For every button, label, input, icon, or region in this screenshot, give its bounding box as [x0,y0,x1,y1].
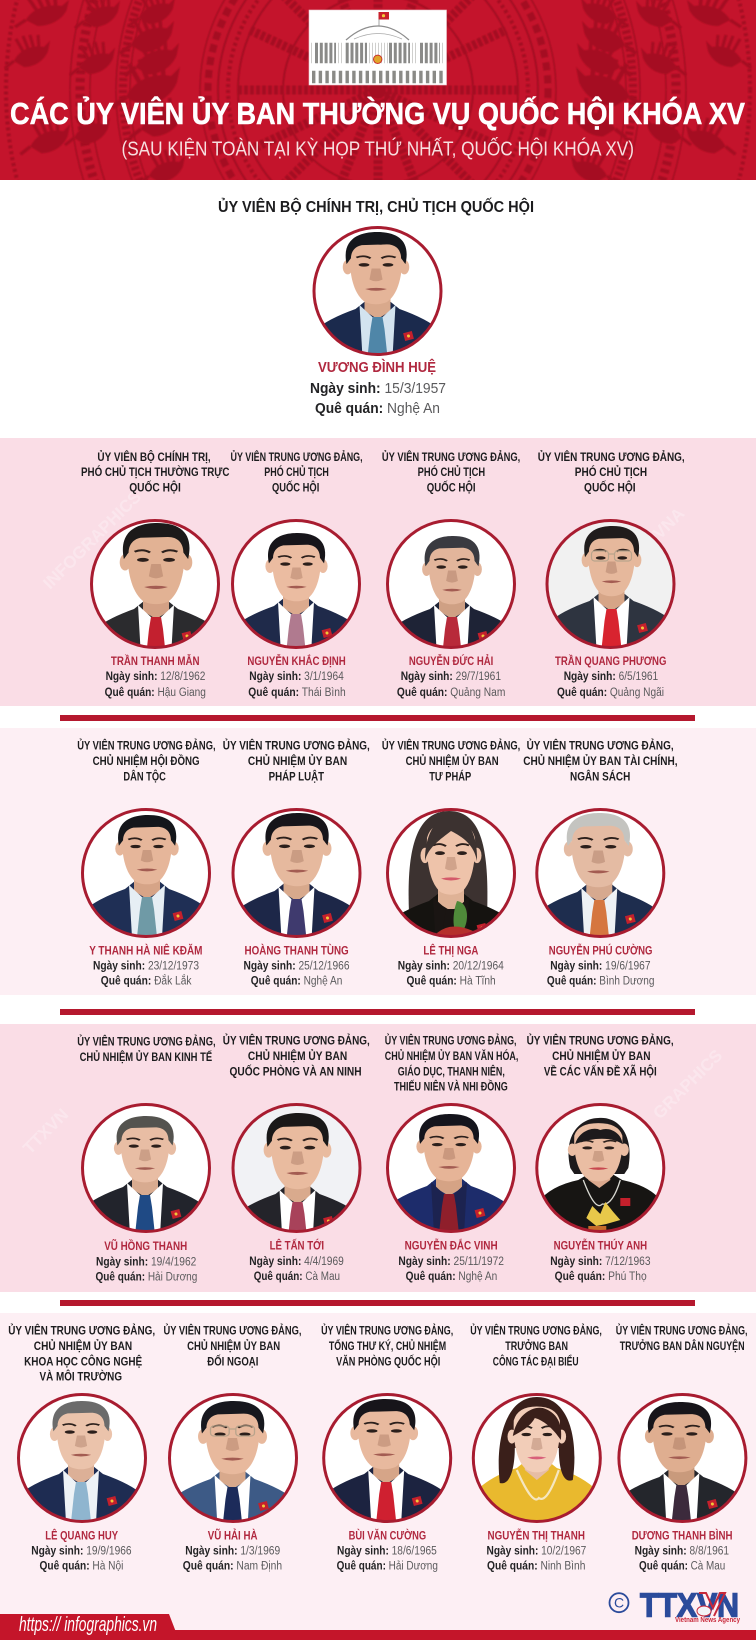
member: Lê Thị Nga: Quê quán: Hà Tĩnh [406,976,496,988]
member: Trần Quang Phương: PHÓ CHỦ TỊCH [575,466,647,479]
member: Y Thanh Hà Niê Kđăm: Y THANH HÀ NIÊ KĐĂM [89,944,202,957]
member: Nguyễn Đắc Vinh: CHỦ NHIỆM ỦY BAN VĂN HÓA, [385,1050,518,1063]
member: Nguyễn Thúy Anh [527,1035,674,1283]
member: Trần Thanh Mẫn: ỦY VIÊN BỘ CHÍNH TRỊ, [97,451,211,464]
member: Nguyễn Khắc Định: NGUYỄN KHẮC ĐỊNH [247,655,346,668]
member: Lê Thị Nga: LÊ THỊ NGA [423,944,478,957]
member: Trần Quang Phương [538,451,685,699]
watermarks: TTXVN [19,1105,72,1158]
member: Nguyễn Đức Hải [382,451,520,699]
member: Lê Tấn Tới: CHỦ NHIỆM ỦY BAN [248,1050,347,1063]
member: Nguyễn Đắc Vinh: Quê quán: Nghệ An [406,1271,497,1283]
member: Bùi Văn Cường: BÙI VĂN CƯỜNG [349,1529,426,1542]
logo: TTXVN: TTXVN [640,1587,739,1624]
member: Lê Tấn Tới: Ngày sinh: 4/4/1969 [249,1256,344,1268]
member: Nguyễn Đắc Vinh: GIÁO DỤC, THANH NIÊN, [398,1065,505,1078]
member: Vũ Hải Hà: Ngày sinh: 1/3/1969 [185,1546,280,1558]
member: Vũ Hải Hà: ỦY VIÊN TRUNG ƯƠNG ĐẢNG, [164,1325,302,1338]
subtitle: (SAU KIỆN TOÀN TẠI KỲ HỌP THỨ NHẤT, QUỐC HỘI KHÓA XV) [122,136,634,160]
member: Lê Quang Huy: ỦY VIÊN TRUNG ƯƠNG ĐẢNG, [8,1325,155,1338]
member: Vũ Hồng Thanh: ỦY VIÊN TRUNG ƯƠNG ĐẢNG, [77,1036,216,1048]
member: Hoàng Thanh Tùng [223,740,370,988]
member: Trần Quang Phương: ỦY VIÊN TRUNG ƯƠNG ĐẢNG, [538,451,685,464]
member: Nguyễn Thị Thanh: TRƯỞNG BAN [505,1340,568,1353]
member: Lê Thị Nga: TƯ PHÁP [429,770,471,784]
member: Hoàng Thanh Tùng: CHỦ NHIỆM ỦY BAN [248,755,347,768]
member: Dương Thanh Bình: Ngày sinh: 8/8/1961 [635,1546,729,1558]
member: Hoàng Thanh Tùng: PHÁP LUẬT [269,770,324,784]
member: Nguyễn Thị Thanh: NGUYỄN THỊ THANH [488,1529,585,1542]
divider bar 2 [60,1009,695,1015]
member: Nguyễn Đắc Vinh: THIẾU NIÊN VÀ NHI ĐỒNG [394,1080,508,1093]
member: Lê Quang Huy: Quê quán: Hà Nội [40,1561,123,1573]
member: Nguyễn Đức Hải: QUỐC HỘI [427,480,476,494]
member: Nguyễn Thúy Anh: NGUYỄN THÚY ANH [554,1239,647,1252]
member: Vũ Hồng Thanh: VŨ HỒNG THANH [104,1240,187,1253]
member: Trần Thanh Mẫn: PHÓ CHỦ TỊCH THƯỜNG TRỰC [81,466,230,479]
member: Trần Quang Phương: Quê quán: Quảng Ngãi [557,687,664,699]
member: Nguyễn Khắc Định [230,451,363,699]
member: Lê Tấn Tới [223,1035,370,1283]
member: Hoàng Thanh Tùng: ỦY VIÊN TRUNG ƯƠNG ĐẢNG, [223,740,370,752]
member: Nguyễn Phú Cường: NGÂN SÁCH [570,770,630,784]
section heading: chairman: ỦY VIÊN BỘ CHÍNH TRỊ, CHỦ TỊCH QUỐC HỘI [218,198,534,216]
member: Nguyễn Khắc Định: Ngày sinh: 3/1/1964 [249,671,344,683]
member: Hoàng Thanh Tùng: HOÀNG THANH TÙNG [244,944,349,957]
member: Nguyễn Phú Cường: Quê quán: Bình Dương [547,976,654,988]
member: Nguyễn Đức Hải: PHÓ CHỦ TỊCH [418,466,485,479]
member: Y Thanh Hà Niê Kđăm: Ngày sinh: 23/12/1973 [93,961,199,973]
watermarks: INFOGRAPHICS [39,487,145,593]
watermarks: VNA [649,504,688,543]
member: Dương Thanh Bình: DƯƠNG THANH BÌNH [632,1529,732,1542]
member: Vũ Hồng Thanh: Quê quán: Hải Dương [96,1271,197,1283]
member: Trần Thanh Mẫn: TRẦN THANH MẪN [111,655,200,668]
logo: TTXVN: C [614,1594,624,1610]
member: Lê Thị Nga [382,740,520,988]
row 2 members [77,740,677,988]
member: Nguyễn Thúy Anh: Ngày sinh: 7/12/1963 [550,1256,650,1268]
member: Dương Thanh Bình [616,1325,748,1573]
member: Nguyễn Phú Cường: Ngày sinh: 19/6/1967 [550,961,650,973]
member: Bùi Văn Cường: TỔNG THƯ KÝ, CHỦ NHIỆM [329,1340,446,1353]
member: Nguyễn Khắc Định: Quê quán: Thái Bình [248,687,346,699]
member: Nguyễn Thúy Anh: ỦY VIÊN TRUNG ƯƠNG ĐẢNG, [527,1035,674,1048]
member: Nguyễn Đức Hải: Quê quán: Quảng Nam [397,687,505,699]
member: Lê Quang Huy: CHỦ NHIỆM ỦY BAN [34,1340,132,1353]
member: Nguyễn Đắc Vinh: NGUYỄN ĐẮC VINH [405,1239,498,1252]
member: Nguyễn Thị Thanh: CÔNG TÁC ĐẠI BIỂU [493,1355,579,1368]
member: Bùi Văn Cường: VĂN PHÒNG QUỐC HỘI [336,1354,440,1368]
member: Hoàng Thanh Tùng: Ngày sinh: 25/12/1966 [244,961,350,973]
member: Lê Thị Nga: Ngày sinh: 20/12/1964 [398,961,504,973]
member: Lê Tấn Tới: ỦY VIÊN TRUNG ƯƠNG ĐẢNG, [223,1035,370,1048]
member: Trần Quang Phương: QUỐC HỘI [584,480,636,494]
watermarks: GRAPHICS [649,1046,726,1123]
member: Trần Quang Phương: TRẦN QUANG PHƯƠNG [555,655,666,668]
member: Nguyễn Thúy Anh: VỀ CÁC VẤN ĐỀ XÃ HỘI [544,1065,657,1078]
member: Vũ Hải Hà: VŨ HẢI HÀ [208,1529,258,1542]
drum birds and figures [5,0,751,183]
member: Vũ Hồng Thanh: Ngày sinh: 19/4/1962 [96,1256,196,1268]
member: Nguyễn Khắc Định: PHÓ CHỦ TỊCH [264,466,329,479]
member: Lê Quang Huy: KHOA HỌC CÔNG NGHỆ [24,1355,142,1368]
icon: National Assembly building [309,10,446,85]
member: Nguyễn Thị Thanh: ỦY VIÊN TRUNG ƯƠNG ĐẢNG, [470,1325,602,1338]
member: Bùi Văn Cường: Quê quán: Hải Dương [337,1561,438,1573]
member: Trần Thanh Mẫn: Quê quán: Hậu Giang [105,687,206,699]
member: Y Thanh Hà Niê Kđăm: CHỦ NHIỆM HỘI ĐỒNG [93,755,200,768]
member: Trần Thanh Mẫn: Ngày sinh: 12/8/1962 [106,671,205,683]
member: Nguyễn Thị Thanh: Quê quán: Ninh Bình [487,1561,585,1573]
row 3 members [77,1035,674,1283]
member: Nguyễn Thúy Anh: CHỦ NHIỆM ỦY BAN [552,1050,650,1063]
member: Nguyễn Thị Thanh: Ngày sinh: 10/2/1967 [486,1546,586,1558]
portrait: Vương Đình Huệ [312,226,442,356]
member: Lê Quang Huy: Ngày sinh: 19/9/1966 [31,1546,132,1558]
member: Nguyễn Phú Cường [523,740,678,988]
row 1 members [81,451,685,699]
person: Vương Đình Huệ: Ngày sinh: 15/3/1957 [310,381,446,397]
member: Nguyễn Đức Hải: ỦY VIÊN TRUNG ƯƠNG ĐẢNG, [382,451,520,464]
drum pattern [4,0,752,180]
member: Vũ Hải Hà: CHỦ NHIỆM ỦY BAN [187,1340,280,1353]
member: Lê Quang Huy: LÊ QUANG HUY [45,1529,118,1542]
member: Lê Tấn Tới: LÊ TẤN TỚI [270,1239,324,1252]
member: Lê Tấn Tới: QUỐC PHÒNG VÀ AN NINH [230,1064,362,1078]
member: Lê Thị Nga: CHỦ NHIỆM ỦY BAN [406,755,499,768]
logo: TTXVN: Vietnam News Agency [675,1617,740,1624]
member: Y Thanh Hà Niê Kđăm: ỦY VIÊN TRUNG ƯƠNG ĐẢNG, [77,740,216,752]
member: Nguyễn Khắc Định: ỦY VIÊN TRUNG ƯƠNG ĐẢNG, [230,451,363,464]
panel: row 3 background [0,1024,756,1292]
member: Lê Quang Huy [8,1325,155,1573]
member: Nguyễn Đắc Vinh [385,1035,518,1283]
member: Y Thanh Hà Niê Kđăm: DÂN TỘC [123,770,166,784]
watermarks [19,487,726,1158]
member: Trần Thanh Mẫn: QUỐC HỘI [129,480,181,494]
member: Nguyễn Thúy Anh: Quê quán: Phú Thọ [555,1271,647,1283]
member: Vũ Hải Hà: Quê quán: Nam Định [183,1561,282,1573]
member: Vũ Hồng Thanh [77,1036,216,1283]
member: Nguyễn Đức Hải: Ngày sinh: 29/7/1961 [401,671,501,683]
member: Nguyễn Phú Cường: ỦY VIÊN TRUNG ƯƠNG ĐẢNG, [527,740,674,752]
divider bar 1 [60,715,695,721]
header banner [0,0,756,180]
member: Bùi Văn Cường: ỦY VIÊN TRUNG ƯƠNG ĐẢNG, [321,1325,453,1338]
member: Nguyễn Đắc Vinh: Ngày sinh: 25/11/1972 [398,1256,504,1268]
member: Nguyễn Đắc Vinh: ỦY VIÊN TRUNG ƯƠNG ĐẢNG, [385,1035,516,1048]
member: Y Thanh Hà Niê Kđăm: Quê quán: Đắk Lắk [101,975,192,988]
member: Dương Thanh Bình: Quê quán: Cà Mau [639,1561,725,1573]
member: Vũ Hải Hà [164,1325,302,1573]
member: Nguyễn Thị Thanh [470,1325,602,1573]
member: Nguyễn Đức Hải: NGUYỄN ĐỨC HẢI [409,655,493,668]
row 4 members [8,1325,747,1573]
member: Bùi Văn Cường: Ngày sinh: 18/6/1965 [337,1546,437,1558]
person: Vương Đình Huệ: Quê quán: Nghệ An [315,401,440,417]
footer strip [0,1614,756,1640]
member: Lê Quang Huy: VÀ MÔI TRƯỜNG [40,1371,122,1384]
panel: row 1 background [0,438,756,706]
member: Trần Thanh Mẫn [81,451,230,699]
member: Hoàng Thanh Tùng: Quê quán: Nghệ An [251,976,342,988]
member: Lê Thị Nga: ỦY VIÊN TRUNG ƯƠNG ĐẢNG, [382,740,520,752]
member: Vũ Hồng Thanh: CHỦ NHIỆM ỦY BAN KINH TẾ [80,1051,212,1064]
member: Nguyễn Phú Cường: CHỦ NHIỆM ỦY BAN TÀI CHÍNH, [523,755,678,768]
member: Lê Tấn Tới: Quê quán: Cà Mau [254,1271,340,1283]
member: Bùi Văn Cường [321,1325,453,1573]
footer url: https:// infographics.vn [19,1614,157,1636]
panel: row 2 background [0,728,756,995]
member: Nguyễn Khắc Định: QUỐC HỘI [272,480,319,494]
member: Y Thanh Hà Niê Kđăm [77,740,216,988]
member: Nguyễn Phú Cường: NGUYỄN PHÚ CƯỜNG [549,944,653,957]
divider bar 3 [60,1300,695,1306]
person: Vương Đình Huệ: VƯƠNG ĐÌNH HUỆ [318,358,436,376]
person: Vương Đình Huệ [310,358,446,417]
panel: row 4 background [0,1313,756,1630]
member: Vũ Hải Hà: ĐỐI NGOẠI [207,1354,258,1368]
member: Trần Quang Phương: Ngày sinh: 6/5/1961 [564,671,658,683]
